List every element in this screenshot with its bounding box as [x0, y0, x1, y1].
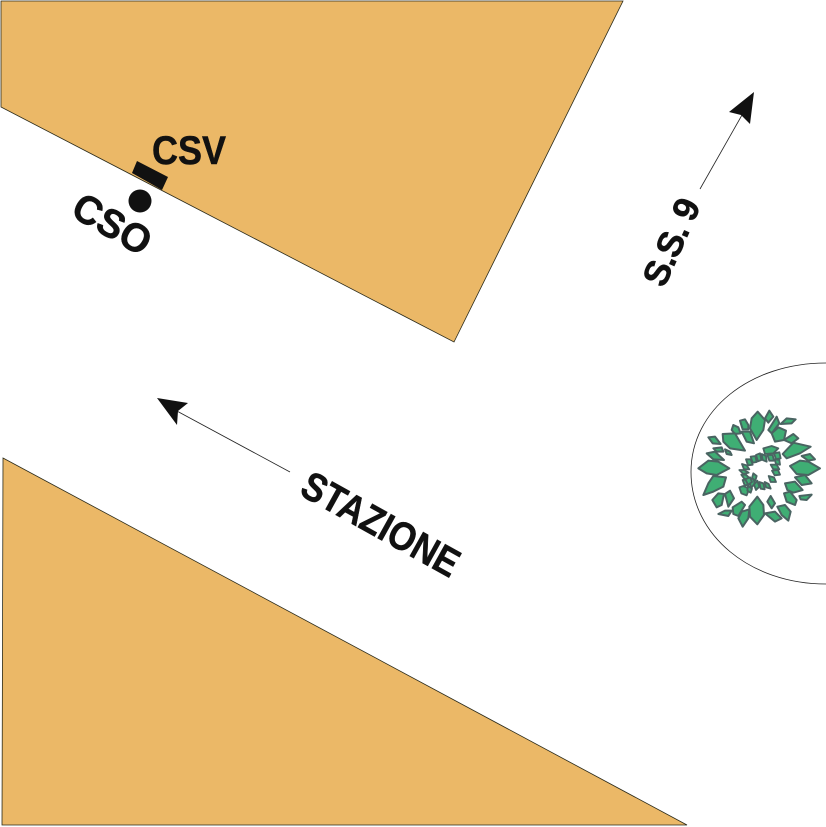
panel: upper orange block — [1, 1, 623, 342]
label: STAZIONE: STAZIONE — [294, 463, 467, 586]
roundabout outline — [691, 363, 826, 584]
label: S.S. 9: S.S. 9 — [634, 192, 709, 292]
arrow: towards Stazione — [157, 398, 290, 472]
icon: CSO circle marker — [128, 190, 152, 212]
arrow: towards S.S. 9 — [700, 92, 754, 189]
label: CSO: CSO — [64, 185, 159, 265]
icon: green plant in roundabout — [698, 411, 820, 527]
inner ring of small leaves — [739, 446, 781, 495]
panel: lower orange block — [2, 458, 687, 825]
label: CSV: CSV — [152, 129, 226, 173]
icon: CSV rectangle marker — [132, 161, 168, 190]
